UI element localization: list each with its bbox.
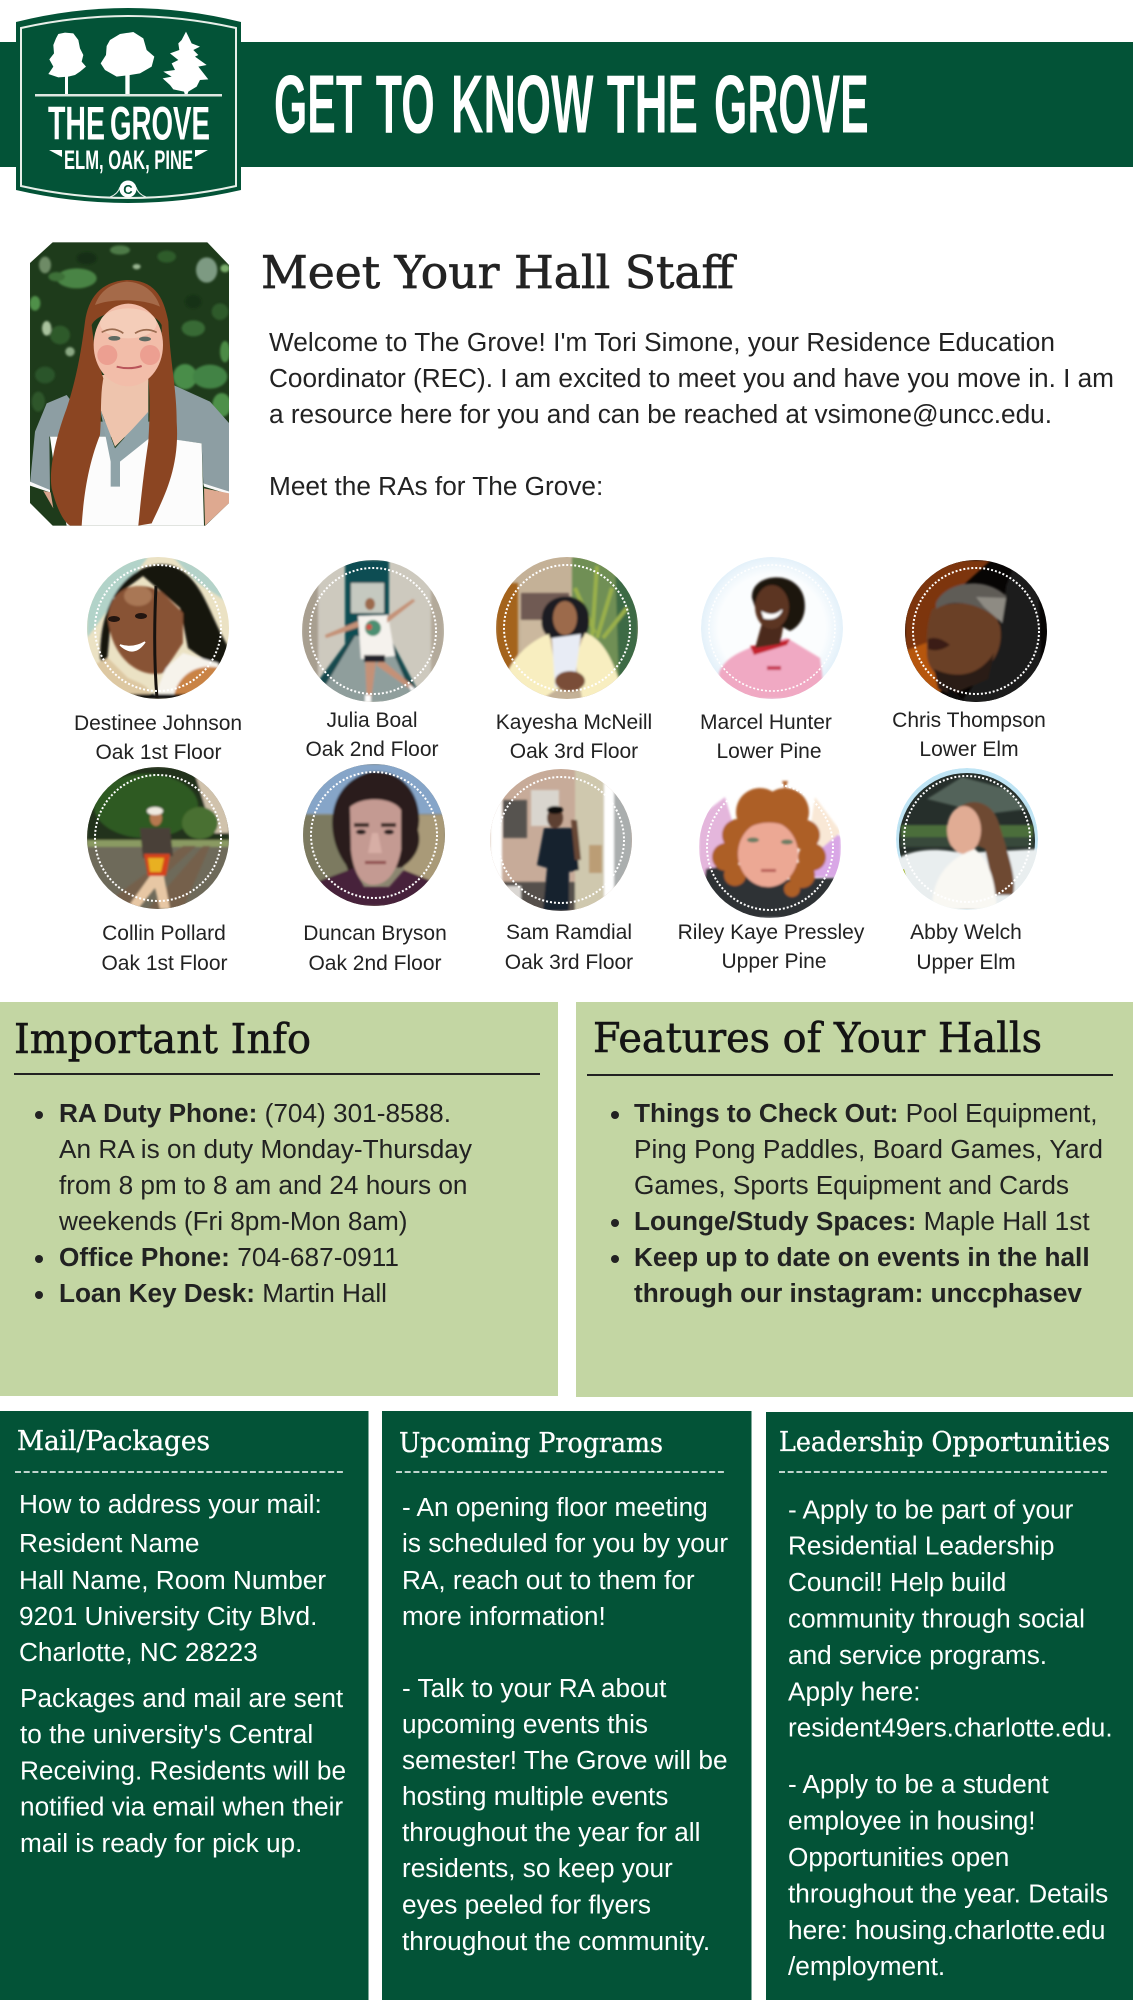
RA: Riley Kaye Pressley	[678, 776, 865, 973]
package note: mail is ready for pick up.	[20, 1828, 302, 1858]
leadership text: employee in housing!	[788, 1806, 1036, 1836]
RA: Julia Boal	[302, 560, 444, 761]
RA: Destinee Johnson	[74, 557, 242, 764]
heading: Important Info	[14, 1015, 311, 1063]
name and floor	[305, 709, 439, 761]
logo wordmark	[48, 96, 210, 150]
name and floor: Julia Boal	[326, 709, 418, 732]
icon: elm tree	[48, 33, 86, 95]
name and floor: Destinee Johnson	[74, 712, 242, 735]
name and floor: Chris Thompson	[892, 709, 1046, 732]
name and floor: Oak 1st Floor	[101, 952, 228, 975]
heading: Meet Your Hall Staff: Meet Your Hall Staff	[261, 246, 737, 299]
programs text: eyes peeled for flyers	[402, 1890, 651, 1920]
name and floor: Oak 1st Floor	[95, 741, 222, 764]
info list: Loan Key Desk: Martin Hall	[59, 1278, 387, 1308]
programs text: throughout the community.	[402, 1926, 710, 1956]
programs text: throughout the year for all	[402, 1817, 700, 1847]
info list: from 8 pm to 8 am and 24 hours on	[59, 1170, 468, 1200]
leadership text	[788, 1494, 1113, 1981]
name and floor: Sam Ramdial	[506, 921, 632, 944]
info list: An RA is on duty Monday-Thursday	[59, 1134, 473, 1164]
logo wordmark: GROVE	[110, 96, 210, 150]
name and floor: Upper Pine	[721, 950, 827, 973]
name and floor	[678, 921, 865, 973]
portrait	[490, 769, 632, 911]
panel: Features of Your Halls	[576, 1002, 1133, 1397]
logo subtitle: ELM, OAK, PINE	[64, 145, 193, 175]
ground line	[35, 94, 222, 96]
name and floor: Oak 2nd Floor	[308, 952, 442, 975]
portrait	[87, 557, 229, 699]
logo C emblem	[110, 180, 146, 198]
features list: through our instagram: unccphasev	[634, 1278, 1082, 1308]
mailing address: Hall Name, Room Number	[19, 1565, 326, 1595]
mailing address	[19, 1489, 326, 1667]
features list: Lounge/Study Spaces: Maple Hall 1st	[634, 1206, 1090, 1236]
RA: Kayesha McNeill	[496, 557, 652, 763]
intro text: Coordinator (REC). I am excited to meet you and have you move in. I am	[269, 363, 1114, 393]
panel: Important Info	[0, 1002, 558, 1396]
heading: Upcoming Programs	[399, 1428, 663, 1459]
leadership text: - Apply to be part of your	[788, 1494, 1074, 1524]
package note: notified via email when their	[20, 1792, 343, 1822]
name and floor	[892, 709, 1046, 761]
name and floor	[101, 922, 228, 975]
name and floor	[505, 921, 633, 974]
name and floor: Upper Elm	[916, 951, 1016, 974]
portrait	[896, 768, 1038, 925]
RA: Sam Ramdial	[490, 769, 633, 974]
programs text: - An opening floor meeting	[402, 1492, 708, 1522]
info list: RA Duty Phone: (704) 301-8588.	[59, 1098, 451, 1128]
title: TO	[376, 57, 435, 150]
features list: Games, Sports Equipment and Cards	[634, 1170, 1069, 1200]
panel: Upcoming Programs	[382, 1411, 752, 2000]
RA: Marcel Hunter	[700, 557, 843, 763]
leadership text: - Apply to be a student	[788, 1769, 1049, 1799]
programs text: - Talk to your RA about	[402, 1673, 667, 1703]
leadership text: and service programs.	[788, 1640, 1047, 1670]
intro text: Welcome to The Grove! I'm Tori Simone, your Residence Education	[269, 327, 1055, 357]
features list: Things to Check Out: Pool Equipment,	[634, 1098, 1098, 1128]
leadership text: Apply here:	[788, 1676, 920, 1706]
package note: Receiving. Residents will be	[20, 1756, 346, 1786]
programs text: residents, so keep your	[402, 1853, 673, 1883]
panel: Leadership Opportunities	[766, 1412, 1133, 2000]
header banner	[0, 42, 1133, 167]
features list	[611, 1098, 1103, 1308]
name and floor: Duncan Bryson	[303, 922, 447, 945]
icon: pine tree	[163, 32, 208, 95]
name and floor: Oak 3rd Floor	[510, 740, 638, 763]
package note: to the university's Central	[20, 1719, 313, 1749]
panel: Mail/Packages	[0, 1411, 368, 2000]
portrait	[87, 767, 229, 909]
name and floor: Oak 3rd Floor	[505, 951, 633, 974]
programs text: semester! The Grove will be	[402, 1745, 728, 1775]
intro text	[269, 327, 1114, 501]
package note	[20, 1683, 346, 1858]
name and floor: Abby Welch	[910, 921, 1022, 944]
package note: Packages and mail are sent	[20, 1683, 344, 1713]
programs text	[402, 1492, 728, 1956]
name and floor	[496, 711, 652, 763]
portrait	[302, 560, 444, 702]
name and floor	[303, 922, 447, 975]
RA: Duncan Bryson	[303, 764, 447, 975]
title: GET	[274, 57, 362, 150]
heading: Mail/Packages	[17, 1426, 210, 1457]
RA: Abby Welch	[896, 768, 1038, 974]
leadership text: throughout the year. Details	[788, 1878, 1108, 1908]
info list	[35, 1098, 473, 1308]
features list: Keep up to date on events in the hall	[634, 1242, 1090, 1272]
name and floor	[74, 712, 242, 764]
programs text: hosting multiple events	[402, 1781, 668, 1811]
info list: Office Phone: 704-687-0911	[59, 1242, 399, 1272]
leadership text: community through social	[788, 1604, 1085, 1634]
logo badge	[16, 8, 241, 203]
RA: Collin Pollard	[87, 767, 229, 975]
features list: Ping Pong Paddles, Board Games, Yard	[634, 1134, 1103, 1164]
intro text: Meet the RAs for The Grove:	[269, 471, 603, 501]
name and floor: Lower Pine	[716, 740, 822, 763]
programs text: is scheduled for you by your	[402, 1528, 728, 1558]
mailing address: Resident Name	[19, 1528, 200, 1558]
heading: Features of Your Halls	[593, 1014, 1042, 1062]
name and floor: Collin Pollard	[102, 922, 226, 945]
leadership text: Council! Help build	[788, 1567, 1006, 1597]
logo C emblem: C	[123, 182, 133, 197]
programs text: upcoming events this	[402, 1709, 648, 1739]
mailing address: Charlotte, NC 28223	[19, 1637, 258, 1667]
portrait	[699, 776, 841, 918]
leadership text: Opportunities open	[788, 1842, 1009, 1872]
title: KNOW	[451, 57, 594, 150]
leadership text: Residential Leadership	[788, 1530, 1054, 1560]
title: GROVE	[714, 57, 869, 150]
title	[274, 57, 869, 150]
title: THE	[607, 57, 698, 150]
mailing address: 9201 University City Blvd.	[19, 1601, 317, 1631]
logo wordmark: THE	[48, 96, 105, 150]
name and floor: Kayesha McNeill	[496, 711, 652, 734]
name and floor: Riley Kaye Pressley	[678, 921, 865, 944]
portrait	[905, 560, 1047, 702]
name and floor: Marcel Hunter	[700, 711, 832, 734]
programs text: more information!	[402, 1601, 606, 1631]
leadership text: /employment.	[788, 1951, 945, 1981]
photo: Tori Simone	[30, 242, 231, 526]
intro text: a resource here for you and can be reached at vsimone@uncc.edu.	[269, 399, 1052, 429]
heading: Leadership Opportunities	[779, 1427, 1110, 1458]
icon: oak tree	[101, 32, 154, 95]
leadership text: here: housing.charlotte.edu	[788, 1915, 1105, 1945]
name and floor: Oak 2nd Floor	[305, 738, 439, 761]
leadership text: resident49ers.charlotte.edu.	[788, 1712, 1113, 1742]
portrait	[496, 557, 638, 699]
mailing address: How to address your mail:	[19, 1489, 322, 1519]
portrait	[303, 764, 445, 906]
name and floor	[910, 921, 1022, 974]
RA: Chris Thompson	[892, 560, 1047, 761]
name and floor	[700, 711, 832, 763]
programs text: RA, reach out to them for	[402, 1565, 695, 1595]
info list: weekends (Fri 8pm-Mon 8am)	[58, 1206, 408, 1236]
portrait	[701, 557, 843, 699]
name and floor: Lower Elm	[919, 738, 1019, 761]
